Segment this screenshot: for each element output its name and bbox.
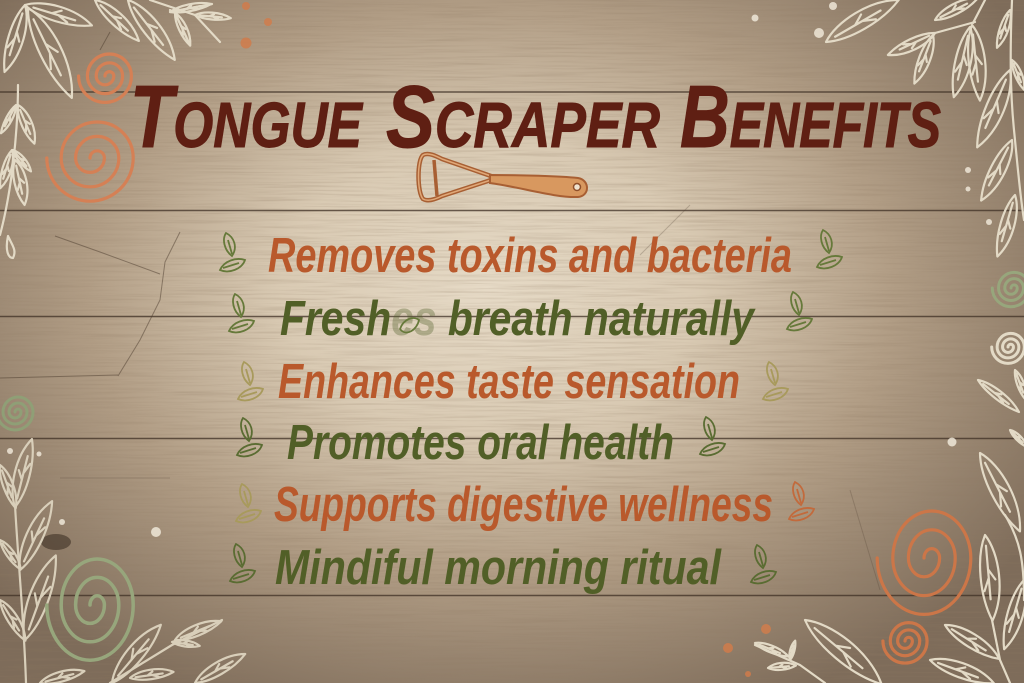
decoration: bottom-right foliage	[754, 369, 1024, 683]
title: BENEFITS	[680, 67, 941, 166]
icon: copper tongue scraper	[418, 154, 587, 200]
title: SCRAPER	[386, 67, 660, 166]
benefit: freshes breath naturally: Freshes breath naturally	[280, 292, 756, 346]
decoration: cream spiral right edge	[992, 333, 1024, 363]
benefit: supports digestive wellness: Supports digestive wellness	[274, 478, 773, 532]
title	[130, 67, 941, 166]
benefit: mindiful morning ritual: Mindiful morning ritual	[275, 541, 722, 595]
benefit: enhances taste sensation: Enhances taste sensation	[278, 355, 740, 409]
benefit: removes toxins and bacteria: Removes toxins and bacteria	[268, 229, 792, 283]
title: TONGUE	[130, 67, 364, 166]
decoration: sage spiral lower left	[47, 559, 133, 660]
decoration: orange spiral lower right	[877, 511, 971, 614]
decoration: orange spiral small upper left	[79, 54, 131, 102]
icons: leaf accents beside the benefits	[220, 230, 842, 583]
decoration: orange spiral bottom right	[883, 623, 927, 663]
decoration: orange spiral large upper left	[47, 122, 133, 201]
benefit: promotes oral health: Promotes oral health	[287, 416, 674, 470]
decoration: bottom-left foliage	[0, 437, 248, 683]
decoration: sage spiral right edge	[992, 272, 1024, 307]
decoration: top-right foliage	[821, 0, 1024, 259]
decoration: top-left foliage	[0, 0, 231, 258]
decoration: sage spiral left edge	[0, 397, 33, 430]
